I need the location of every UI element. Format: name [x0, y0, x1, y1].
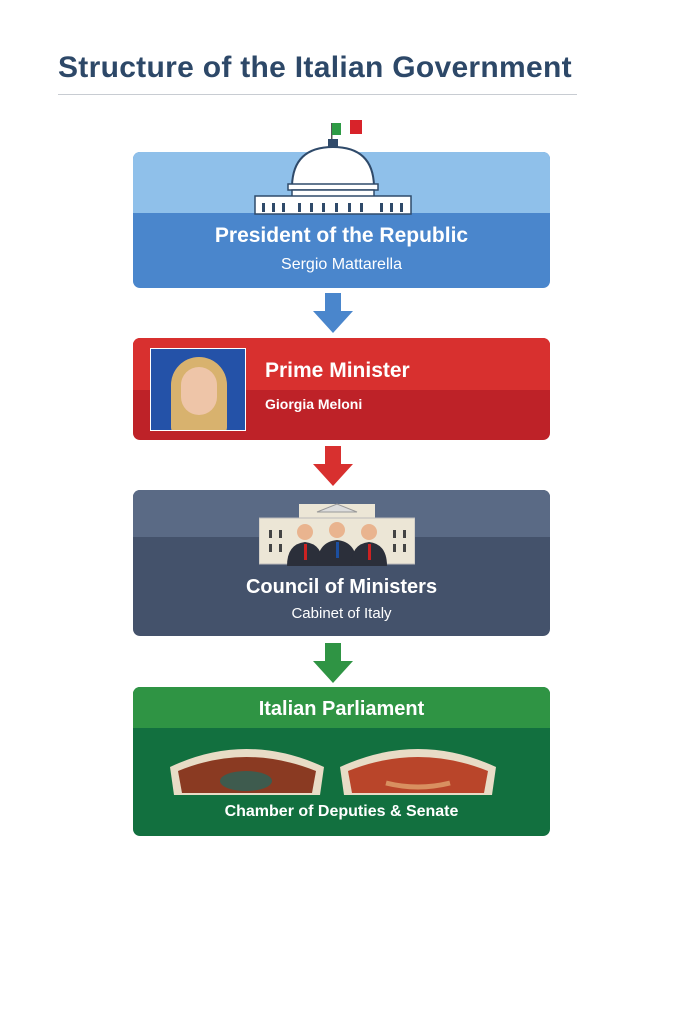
- arrow: red: [313, 446, 353, 486]
- panel: parliament: [133, 687, 550, 836]
- text: president name: Sergio Mattarella: [281, 256, 402, 273]
- heading: president: President of the Republic: [215, 224, 468, 247]
- text: cabinet: Cabinet of Italy: [291, 605, 392, 622]
- icon: building with ministers: [259, 504, 415, 566]
- panel: president: [133, 152, 550, 288]
- arrow: blue: [313, 293, 353, 333]
- text: chambers: Chamber of Deputies & Senate: [225, 803, 458, 820]
- icon: palace with flag: [254, 120, 412, 215]
- panel: prime minister: [133, 338, 550, 440]
- title: Structure of the Italian Government: [58, 51, 572, 84]
- panel: council: [133, 490, 550, 636]
- heading: prime minister: Prime Minister: [265, 359, 410, 382]
- heading: council: Council of Ministers: [246, 576, 437, 598]
- photo: Giorgia Meloni: [150, 348, 246, 431]
- arrow: green: [313, 643, 353, 683]
- text: PM name: Giorgia Meloni: [265, 396, 362, 412]
- heading: parliament: Italian Parliament: [259, 698, 424, 720]
- icon: chambers: [170, 749, 496, 795]
